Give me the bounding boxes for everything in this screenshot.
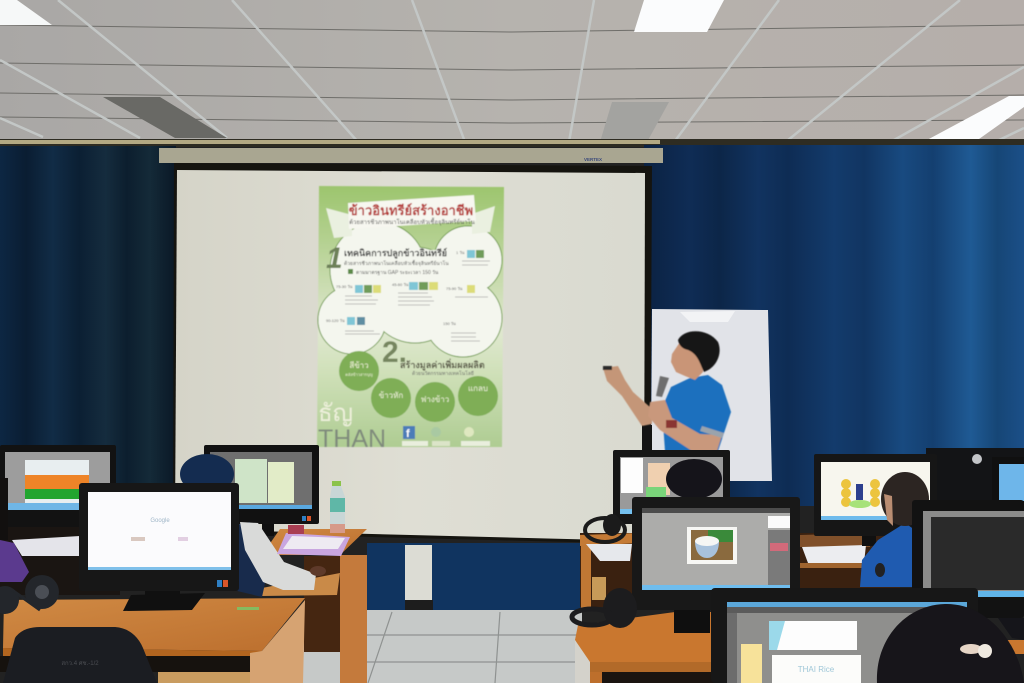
floor bbox=[303, 610, 582, 683]
microphone bbox=[656, 376, 669, 397]
headset: back right bbox=[585, 514, 625, 542]
monitor: back centre bbox=[204, 445, 319, 536]
student: left edge bbox=[0, 478, 29, 582]
monitor: Dell bbox=[926, 448, 1024, 500]
timeline chips: 1 วัน bbox=[456, 250, 465, 255]
student: blue shirt bbox=[860, 472, 929, 587]
monitor: front centre bbox=[711, 588, 978, 683]
projected slide bbox=[317, 186, 504, 453]
desk: back row left bbox=[0, 525, 120, 595]
desk: back right bbox=[580, 533, 900, 608]
title banner: ด้วยสารชีวภาพนาโนเคลือบหัวเชื้อจุลินทรีย์นาโน bbox=[349, 216, 475, 226]
hair bbox=[678, 331, 720, 372]
desk: back left bbox=[262, 529, 367, 683]
monitor: right edge desktop bbox=[992, 457, 1024, 503]
whiteboard bbox=[642, 309, 772, 481]
section 2 heading: ด้วยนวัตกรรมทางเทคโนโลยี bbox=[412, 370, 474, 377]
circle: broken rice: ข้าวหัก bbox=[379, 391, 403, 400]
section 1 heading: เทคนิคการปลูกข้าวอินทรีย์ bbox=[344, 247, 447, 259]
pillar under screen bbox=[405, 545, 433, 614]
air vent: left bbox=[103, 97, 227, 138]
headset: left bbox=[0, 575, 59, 614]
projector housing: VERTEX bbox=[584, 157, 602, 162]
water bottle bbox=[330, 481, 345, 533]
monitor: right dark canvas bbox=[912, 500, 1024, 640]
timeline chips: 75-90 วัน bbox=[446, 286, 463, 291]
circle: rice colour bbox=[339, 351, 379, 391]
student: front head with hair clip bbox=[877, 604, 1024, 683]
monitor: illustrator artwork bbox=[814, 454, 937, 546]
forearm bbox=[648, 400, 722, 451]
ceiling light: right bbox=[927, 96, 1024, 140]
timeline chips: 75-30 วัน bbox=[336, 284, 353, 289]
presenter bbox=[603, 331, 731, 451]
pointing arm bbox=[603, 366, 652, 426]
circle: bran: แกลบ bbox=[468, 384, 488, 393]
contact icons: f bbox=[406, 428, 410, 440]
monitor: back right bbox=[613, 450, 730, 524]
curtain: right bbox=[644, 145, 1024, 506]
sleeve bbox=[240, 522, 316, 590]
teacup photo bbox=[687, 527, 737, 564]
circle: rice colour: สีข้าว bbox=[349, 361, 369, 370]
monitor: front left: Google bbox=[150, 518, 170, 524]
student: hooded bbox=[180, 454, 326, 597]
shirt bbox=[662, 375, 731, 451]
timeline chips: 90-120 วัน bbox=[326, 318, 345, 323]
timeline chips: 45-60 วัน bbox=[392, 282, 409, 287]
timeline chips bbox=[326, 250, 490, 341]
monitor: teacup image bbox=[632, 497, 800, 633]
section 2 heading: 2. bbox=[382, 336, 407, 369]
desk papers and folder bbox=[277, 525, 350, 556]
section 1 heading bbox=[326, 242, 449, 276]
hair clip bbox=[960, 644, 992, 658]
monitor: front centre: THAI Rice bbox=[798, 665, 835, 674]
papers on back right desk bbox=[586, 544, 866, 563]
ceiling bbox=[0, 0, 1024, 147]
section 2 heading: สร้างมูลค่าเพิ่มผลผลิต bbox=[400, 358, 485, 371]
section 1 heading: ตามมาตรฐาน GAP ระยะเวลา 150 วัน bbox=[356, 270, 439, 276]
brand wordmark: THAN bbox=[318, 425, 386, 453]
desk: front left bbox=[0, 598, 305, 683]
section 1 heading: 1 bbox=[326, 242, 343, 275]
curtain: left bbox=[0, 146, 176, 488]
ceiling light: top centre bbox=[634, 0, 724, 32]
section 2 heading bbox=[382, 336, 485, 377]
ceiling light: top left bbox=[0, 0, 52, 25]
chair: สกว.4 ศช.-1/2 bbox=[61, 660, 99, 667]
chair bbox=[3, 627, 157, 683]
brand wordmark bbox=[318, 400, 386, 453]
projector housing bbox=[159, 148, 663, 163]
student: dark hair behind monitor bbox=[666, 459, 722, 499]
circle: bran bbox=[458, 376, 498, 416]
cloud panel bbox=[318, 222, 502, 357]
head bbox=[671, 342, 703, 380]
monitor: front left bbox=[79, 483, 239, 611]
curtain: below screen bbox=[367, 543, 582, 611]
desk: front right bbox=[575, 612, 1024, 683]
sleeve cuff bbox=[700, 426, 724, 438]
section 1 heading: ด้วยสารชีวภาพนาโนเคลือบหัวเชื้อจุลินทรีย์นาโน bbox=[344, 258, 449, 267]
air vent: centre bbox=[600, 102, 669, 142]
circle: broken rice bbox=[371, 378, 411, 418]
circle: husk: ฟางข้าว bbox=[421, 395, 449, 404]
brand wordmark: ธัญ bbox=[318, 400, 353, 427]
title banner: ข้าวอินทรีย์สร้างอาชีพ bbox=[349, 203, 473, 218]
product circles bbox=[339, 351, 498, 422]
projection screen bbox=[173, 163, 652, 544]
contact icons bbox=[402, 426, 490, 446]
title banner bbox=[326, 195, 495, 238]
timeline chips: 150 วัน bbox=[443, 321, 456, 326]
circle: rice colour: คลัสข้าวสารบุญ bbox=[345, 372, 373, 378]
monitor: back left bbox=[0, 445, 116, 527]
circle: husk bbox=[415, 382, 455, 422]
headset: front right bbox=[572, 588, 637, 628]
